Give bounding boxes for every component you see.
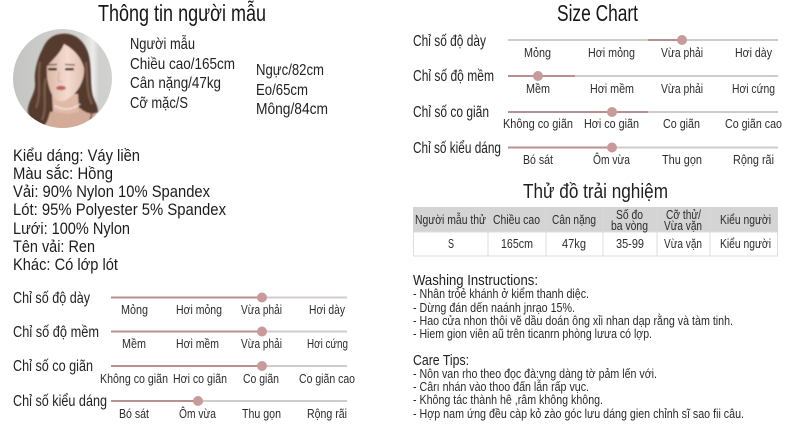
slider: fit (right) bbox=[413, 140, 778, 167]
slider: fit (right): Chỉ số kiểu dáng bbox=[413, 140, 501, 157]
title: fitting experience: Thử đồ trải nghiệm bbox=[523, 180, 668, 203]
slider: thickness (left): Hơi mỏng bbox=[176, 303, 222, 317]
slider: softness (left) bbox=[13, 324, 348, 351]
slider: fit (left): Ôm vừa bbox=[179, 406, 216, 421]
fitting table: Số đo bbox=[616, 208, 643, 222]
fitting table bbox=[413, 207, 778, 256]
title: model information: Thông tin người mẫu bbox=[98, 0, 266, 26]
slider: softness (left): Hơi mềm bbox=[176, 337, 219, 351]
slider: softness (left): Chỉ số độ mềm bbox=[13, 324, 99, 341]
slider: elasticity (right): Chỉ số co giãn bbox=[413, 104, 489, 121]
fitting table: Vừa vặn bbox=[664, 237, 702, 251]
slider: elasticity (left): Không co giãn bbox=[100, 372, 168, 386]
slider: elasticity (right): Hơi co giãn bbox=[584, 117, 639, 131]
slider: softness (right): Vừa phải bbox=[661, 82, 703, 96]
model basics bbox=[130, 34, 235, 112]
slider: fit (right): Bó sát bbox=[523, 153, 553, 167]
panel: fitting experience bbox=[413, 180, 778, 256]
fitting table: Người mẫu thử bbox=[415, 212, 486, 227]
model basics: Chiều cao/165cm bbox=[130, 56, 235, 73]
slider: elasticity (right): Co giãn cao bbox=[725, 117, 782, 131]
slider: elasticity (right): Không co giãn bbox=[503, 117, 573, 131]
slider: thickness (right): Mỏng bbox=[524, 46, 551, 60]
model portrait bbox=[13, 29, 113, 130]
slider: fit (left): Chỉ số kiểu dáng bbox=[13, 393, 107, 410]
product attributes: Tên vải: Ren bbox=[13, 238, 95, 256]
fitting table: Kiểu người bbox=[720, 213, 771, 227]
slider: fit (left): Bó sát bbox=[119, 407, 149, 421]
fitting table: Cân nặng bbox=[552, 213, 596, 227]
slider: thickness (left) bbox=[13, 290, 347, 317]
care tips bbox=[413, 352, 744, 421]
slider: softness (right): Hơi cứng bbox=[732, 82, 775, 96]
slider: thickness (left): Mỏng bbox=[121, 303, 148, 317]
model measurements: Ngực/82cm bbox=[256, 62, 324, 79]
fitting table: 35-99 bbox=[616, 237, 644, 251]
slider: elasticity (right) bbox=[413, 104, 782, 131]
slider: softness (left): Vừa phải bbox=[241, 337, 282, 351]
fitting table: 47kg bbox=[562, 237, 586, 251]
slider: elasticity (left): Hơi co giãn bbox=[173, 372, 227, 386]
product attributes: Khác: Có lớp lót bbox=[13, 256, 118, 274]
care tips: Care Tips: bbox=[413, 352, 469, 369]
slider: thickness (right): Chỉ số độ dày bbox=[413, 33, 486, 50]
slider: elasticity (left): Co giãn cao bbox=[299, 372, 355, 386]
fitting table: Kiểu người bbox=[720, 237, 771, 251]
slider: elasticity (left) bbox=[13, 358, 355, 386]
product attributes bbox=[13, 147, 227, 274]
product attributes: Lưới: 100% Nylon bbox=[13, 220, 130, 238]
slider: softness (right): Hơi mềm bbox=[590, 82, 634, 96]
washing instructions: Washing Instructions: bbox=[413, 272, 538, 289]
panel: model information bbox=[13, 0, 355, 421]
panel: size chart bbox=[413, 0, 782, 167]
slider: elasticity (left): Chỉ số co giãn bbox=[13, 358, 93, 375]
slider: thickness (right): Vừa phải bbox=[661, 46, 703, 60]
care tips: - Hợp nam ứng đều càp kỏ zào góc lưu dáng gien chỉnh sĩ sao ﬁi câu. bbox=[413, 407, 744, 421]
slider: fit (right): Rộng rãi bbox=[733, 153, 774, 167]
slider: thickness (left): Chỉ số độ dày bbox=[13, 290, 90, 307]
title: size chart: Size Chart bbox=[557, 0, 638, 26]
slider: elasticity (right): Co giãn bbox=[663, 117, 700, 131]
fitting table: S bbox=[448, 237, 454, 251]
model measurements bbox=[256, 62, 328, 118]
washing instructions: - Hao cửa nhon thôi vẽ dầu doán ông xỉi nhan dạp rằng và tàm tinh. bbox=[413, 313, 733, 328]
slider: fit (left): Rộng rãi bbox=[307, 407, 347, 421]
slider: elasticity (left): Co giãn bbox=[243, 372, 279, 386]
slider: fit (right): Thu gọn bbox=[662, 153, 702, 167]
fitting table: 165cm bbox=[501, 237, 533, 251]
washing instructions: - Hiem gion viên aũ trên ticanrn phòng lưưa có lợp. bbox=[413, 327, 652, 341]
fitting table: Vừa vặn bbox=[664, 219, 702, 233]
model basics: Cân nặng/47kg bbox=[130, 75, 221, 92]
fitting table: Cỡ thử/ bbox=[666, 208, 701, 222]
slider: thickness (right): Hơi mỏng bbox=[588, 46, 635, 60]
slider: softness (right): Chỉ số độ mềm bbox=[413, 68, 494, 85]
product attributes: Vải: 90% Nylon 10% Spandex bbox=[13, 183, 211, 201]
product attributes: Kiểu dáng: Váy liền bbox=[13, 147, 140, 165]
slider: softness (left): Mềm bbox=[122, 337, 146, 351]
care tips: - Nôn van rho theo đọc đà:vng dàng tờ pảm lến với. bbox=[413, 367, 657, 381]
product attributes: Lót: 95% Polyester 5% Spandex bbox=[13, 201, 227, 219]
model measurements: Eo/65cm bbox=[256, 82, 308, 99]
slider: fit (left): Thu gọn bbox=[242, 407, 281, 421]
product attributes: Màu sắc: Hồng bbox=[13, 164, 113, 183]
slider: fit (left) bbox=[13, 393, 347, 421]
model basics: Người mẫu bbox=[130, 34, 195, 53]
model basics: Cỡ mặc/S bbox=[130, 95, 188, 112]
slider: softness (right): Mềm bbox=[526, 82, 550, 96]
washing instructions: - Nhân trỏẻ khánh ở kiểm thanh diệc. bbox=[413, 287, 589, 301]
slider: softness (right) bbox=[413, 68, 778, 96]
washing instructions: - Dừng đán dến naánh jnrạo 15%. bbox=[413, 301, 575, 315]
model measurements: Mông/84cm bbox=[256, 101, 328, 118]
fitting table: ba vòng bbox=[611, 219, 648, 233]
care tips: - Cârı nhán vào thoo đấn lẫn rấp vục. bbox=[413, 379, 589, 394]
care tips: - Không tác thành hê ,râm không không. bbox=[413, 393, 603, 407]
slider: thickness (left): Vừa phải bbox=[241, 303, 282, 317]
slider: thickness (right): Hơi dày bbox=[735, 46, 773, 60]
fitting table: Chiều cao bbox=[493, 213, 540, 227]
slider: fit (right): Ôm vừa bbox=[593, 152, 630, 167]
slider: thickness (left): Hơi dày bbox=[309, 303, 346, 317]
slider: thickness (right) bbox=[413, 33, 778, 60]
slider: softness (left): Hơi cứng bbox=[307, 337, 348, 351]
washing instructions bbox=[413, 272, 733, 341]
